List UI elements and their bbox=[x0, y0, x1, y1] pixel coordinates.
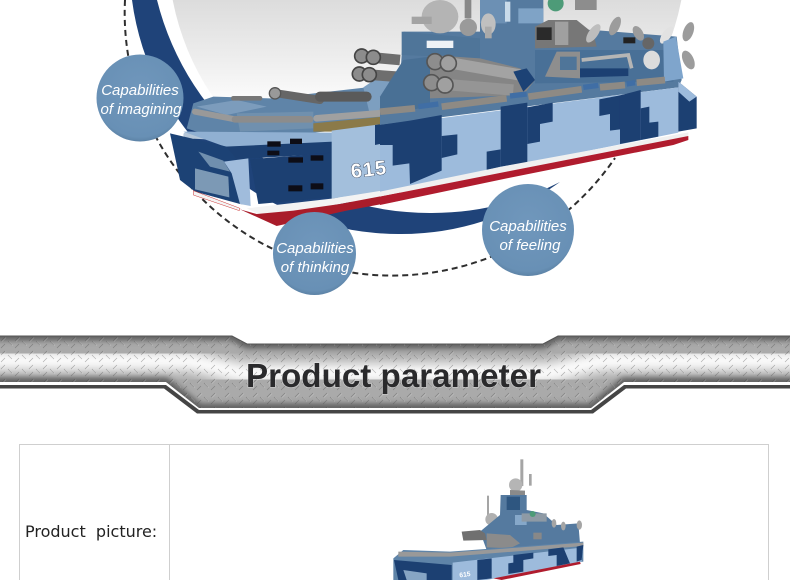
deck rail bbox=[380, 80, 665, 112]
camouflaged hull bbox=[380, 82, 697, 193]
gray cabin block bbox=[545, 52, 580, 78]
hull number: 615 bbox=[350, 157, 388, 183]
callout: capabilities of thinking: of thinking bbox=[281, 259, 350, 276]
callout: capabilities of imagining: Capabilities bbox=[101, 82, 179, 99]
callout: capabilities of feeling bbox=[482, 184, 574, 276]
small ship: hull number: 615 bbox=[459, 571, 471, 579]
ship: bow section bbox=[170, 49, 400, 226]
blue crescent ring bbox=[132, 0, 560, 234]
callout: capabilities of feeling: Capabilities bbox=[489, 218, 567, 235]
callout: capabilities of feeling: of feeling bbox=[500, 237, 561, 254]
launcher tubes bbox=[352, 49, 400, 82]
background disc bbox=[168, 0, 686, 210]
small ship: superstructure bbox=[462, 490, 582, 550]
table: product parameter bbox=[20, 444, 768, 580]
callout: capabilities of imagining bbox=[96, 54, 184, 142]
product picture: small ship bbox=[393, 459, 583, 580]
section banner: product parameter bbox=[0, 330, 790, 415]
banner title: Product parameter bbox=[246, 357, 541, 394]
domes and masts bbox=[412, 0, 510, 38]
pipework bbox=[582, 55, 632, 68]
propellers bbox=[583, 15, 697, 71]
small ship: masts bbox=[485, 459, 532, 526]
small ship: hull bbox=[393, 542, 583, 580]
callout: capabilities of thinking bbox=[273, 212, 356, 295]
row label: Product picture: bbox=[25, 522, 157, 541]
green radar ball bbox=[548, 0, 564, 11]
dashed orbit line bbox=[125, 0, 615, 276]
radar mount bbox=[535, 0, 597, 48]
main ship illustration bbox=[170, 0, 697, 226]
callout: capabilities of imagining: of imagining bbox=[101, 101, 182, 118]
callout: capabilities of thinking: Capabilities bbox=[276, 240, 354, 257]
deck guns and rails bbox=[187, 88, 400, 137]
torpedo launcher bbox=[424, 54, 535, 98]
ship: midship and stern section bbox=[380, 0, 697, 205]
